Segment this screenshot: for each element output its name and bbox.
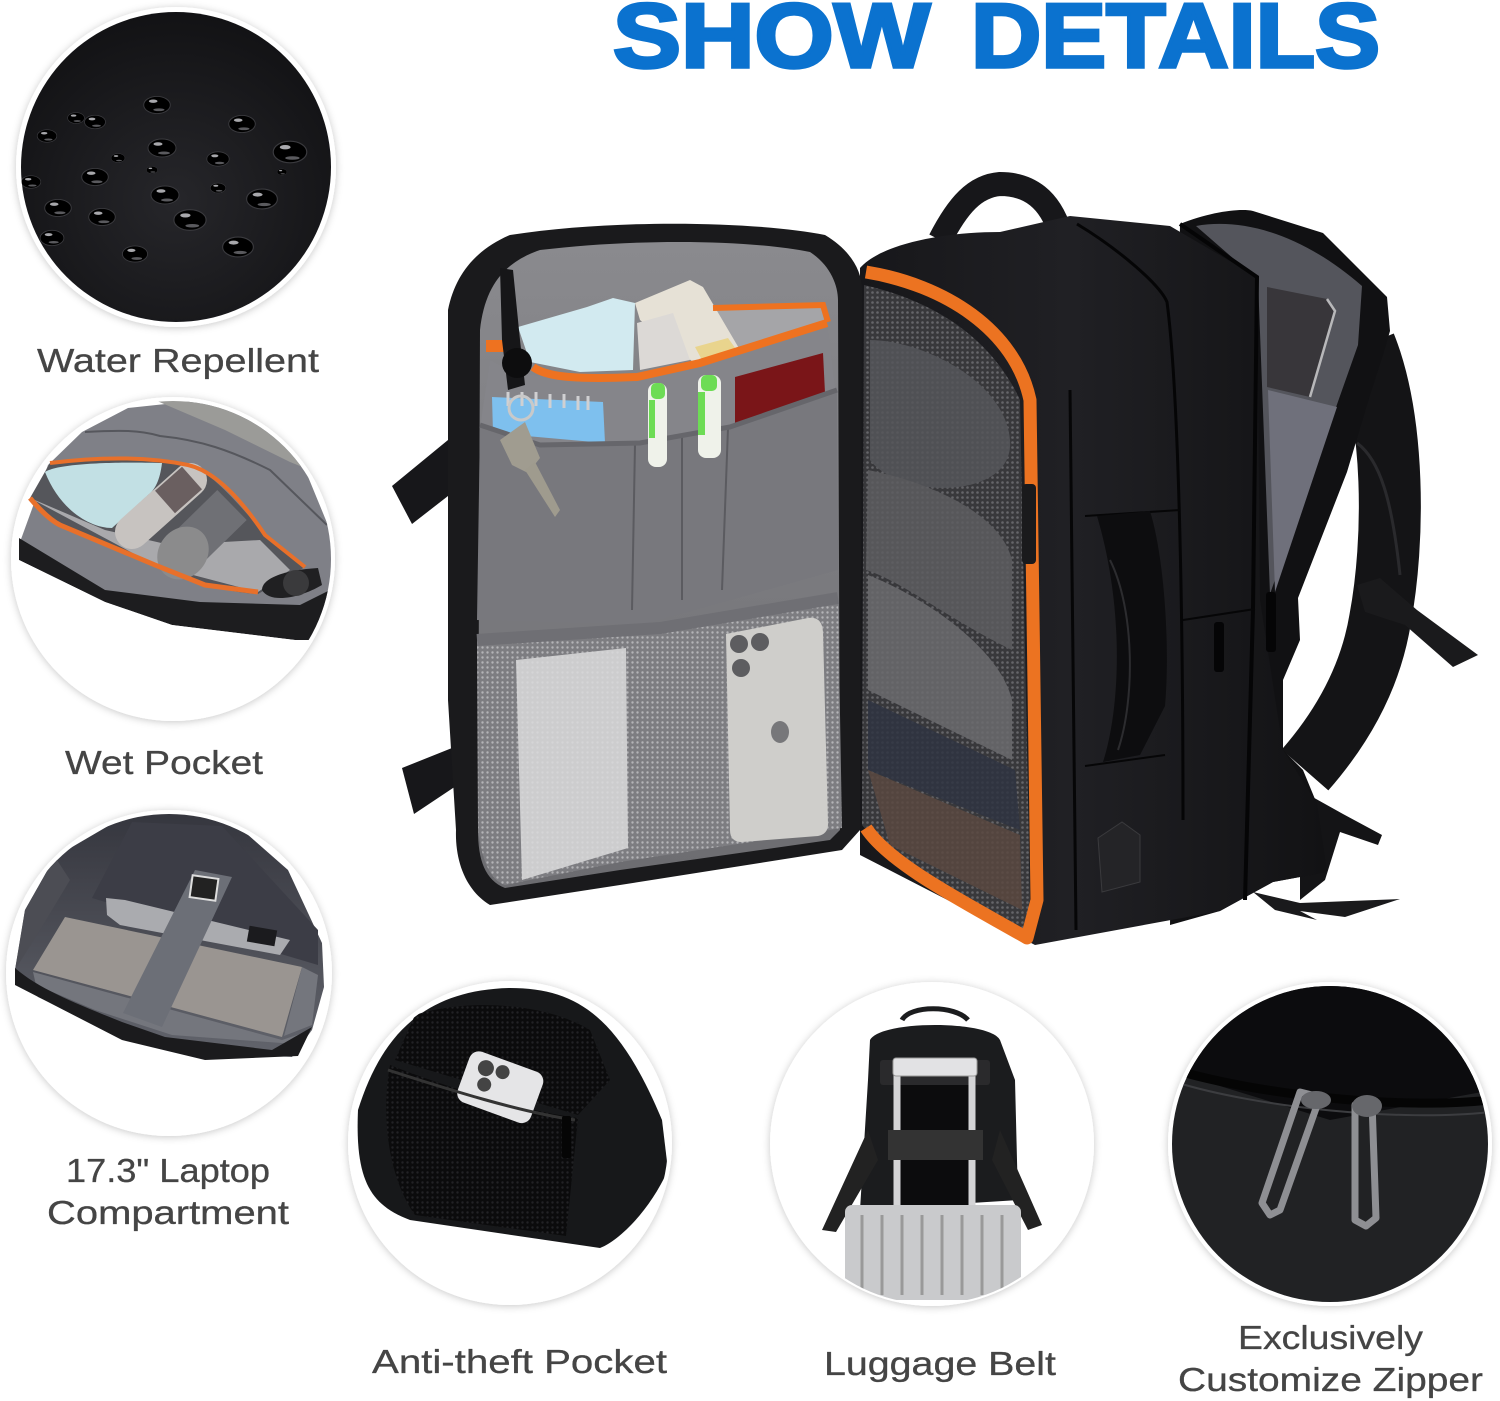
top handle bbox=[940, 184, 1060, 240]
label: laptop compartment: 17.3" Laptop bbox=[66, 1152, 270, 1189]
notebook bbox=[492, 397, 605, 443]
orange zipper bbox=[533, 323, 827, 378]
USB port bbox=[1098, 822, 1140, 892]
label: water repellent: Water Repellent bbox=[37, 342, 319, 379]
side buckles bbox=[392, 440, 456, 814]
rear compartment interior bbox=[1196, 224, 1362, 594]
padded shoulder strap bbox=[1305, 345, 1390, 770]
organizer pockets bbox=[477, 390, 838, 625]
pens bbox=[648, 383, 667, 467]
toiletry bottles bbox=[635, 280, 740, 362]
label: laptop compartment bbox=[47, 1152, 289, 1231]
label: wet pocket: Wet Pocket bbox=[65, 744, 263, 781]
title bbox=[613, 0, 1380, 87]
laptop bbox=[33, 917, 302, 1037]
bottles bbox=[132, 480, 190, 532]
label: exclusively customize zipper: Customize Zipper bbox=[1178, 1361, 1483, 1398]
towel bbox=[518, 298, 635, 372]
black rim bbox=[15, 968, 312, 1060]
panel: laptop compartment detail bbox=[5, 810, 335, 1136]
strap bbox=[123, 870, 232, 1027]
label: luggage belt: Luggage Belt bbox=[824, 1345, 1056, 1382]
panel: anti-theft pocket detail bbox=[348, 980, 673, 1305]
black rim bbox=[19, 538, 330, 640]
carabiner and strap bbox=[500, 268, 525, 390]
side handle bbox=[1097, 511, 1167, 762]
pouch lower front bbox=[480, 323, 836, 448]
phone bbox=[106, 898, 290, 955]
sternum buckle and strap end bbox=[1357, 578, 1478, 667]
rear compartment shell bbox=[1170, 210, 1390, 925]
panel: water repellent detail bbox=[10, 5, 340, 330]
pocket inside bbox=[30, 458, 305, 594]
red battery bbox=[735, 353, 825, 425]
lower mesh pocket bbox=[477, 600, 842, 885]
lining bbox=[33, 972, 312, 1044]
lower buckle and straps bbox=[1300, 790, 1382, 900]
towel bbox=[45, 463, 162, 528]
upper mesh pouch interior bbox=[700, 305, 827, 363]
laptop inside rear compartment bbox=[1267, 287, 1335, 397]
orange zippers bbox=[50, 458, 305, 567]
zipper pull bbox=[262, 568, 322, 598]
main compartment body bbox=[860, 216, 1327, 945]
panel: luggage belt detail bbox=[770, 982, 1095, 1307]
label: anti-theft pocket: Anti-theft Pocket bbox=[372, 1343, 667, 1380]
main product: open backpack bbox=[392, 184, 1478, 945]
panel: wet pocket detail bbox=[5, 397, 340, 730]
keys bbox=[500, 396, 560, 517]
phone bbox=[726, 618, 828, 842]
panel: zipper detail bbox=[1168, 982, 1493, 1307]
power bank bbox=[516, 648, 628, 880]
mesh compartment with orange zip bbox=[862, 285, 1030, 930]
open front flap bbox=[448, 224, 862, 905]
outer pouch bbox=[19, 398, 332, 610]
pocket zip pulls bbox=[1214, 622, 1224, 672]
grey folder bbox=[1268, 390, 1337, 592]
label: exclusively customize zipper: Exclusively bbox=[1238, 1319, 1424, 1356]
label: laptop compartment: Compartment bbox=[47, 1194, 289, 1231]
label: exclusively customize zipper bbox=[1178, 1319, 1483, 1398]
